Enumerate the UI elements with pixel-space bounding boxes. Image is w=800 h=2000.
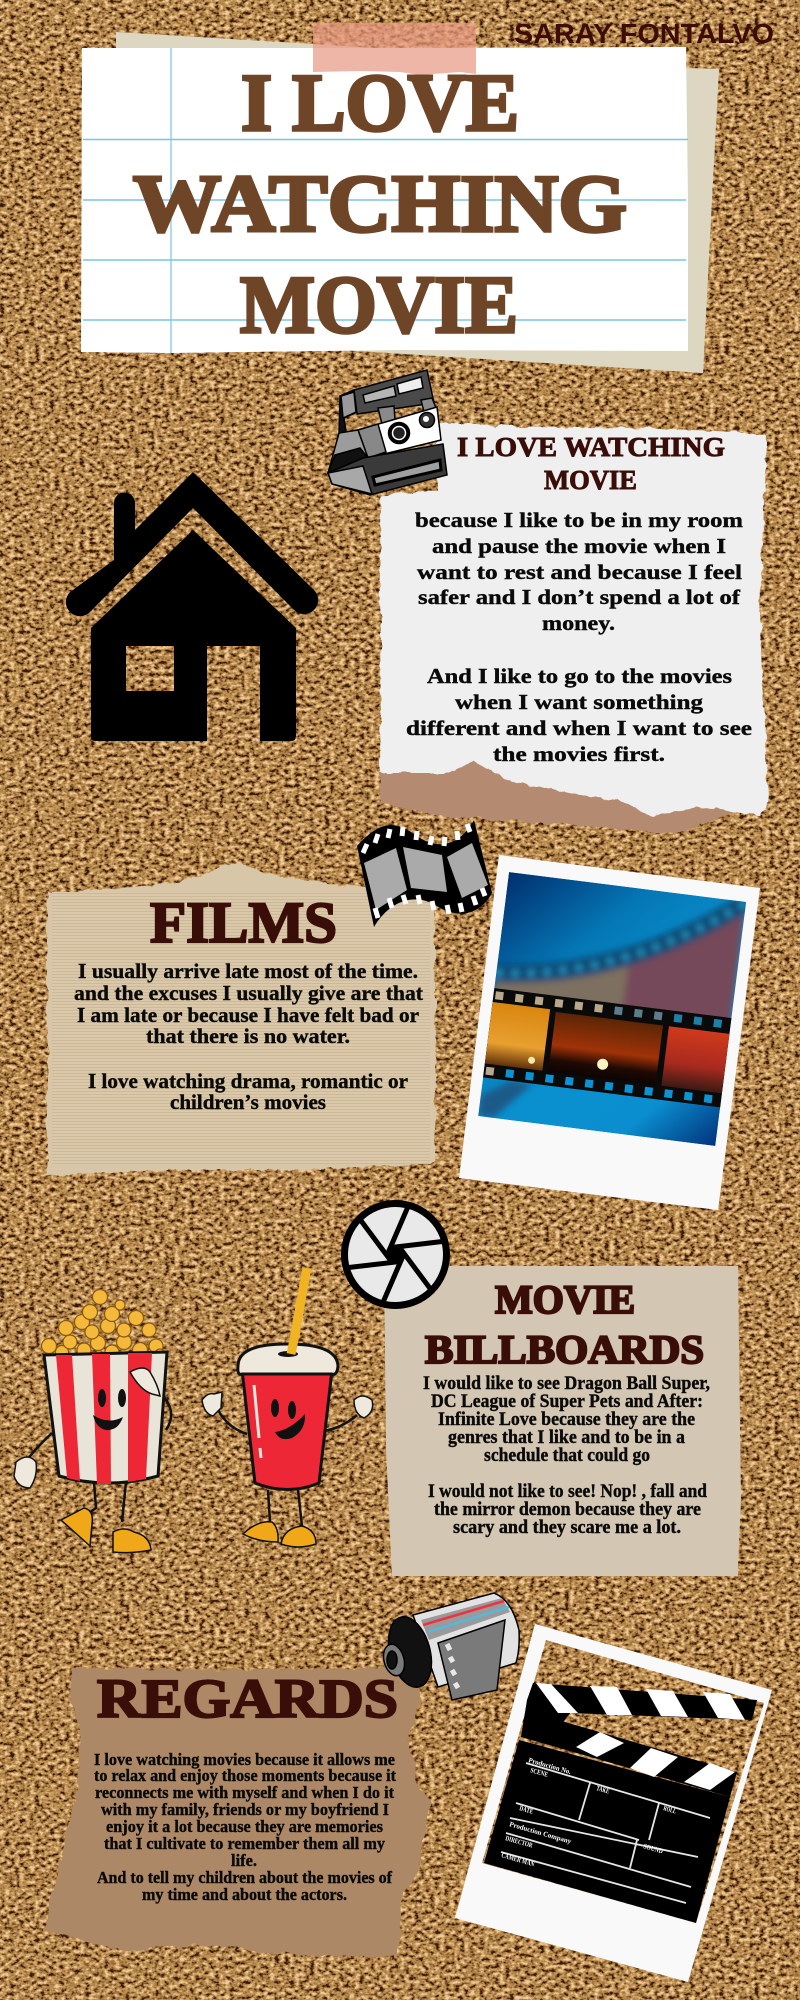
body text: because I like to be in my room (415, 508, 744, 532)
illustration: soda cup character (202, 1268, 373, 1547)
board labels: ROLL (662, 1804, 677, 1816)
straw (291, 1268, 307, 1356)
polaroid frame (459, 855, 760, 1210)
body text: safer and I don’t spend a lot of (418, 585, 741, 609)
photo (476, 872, 750, 1147)
heading: MOVIE (495, 1277, 635, 1322)
clapperboard (484, 1683, 757, 1923)
body text: and pause the movie when I (432, 534, 726, 558)
board lines (501, 1763, 710, 1903)
title text: WATCHING (133, 158, 627, 249)
face (254, 1385, 305, 1458)
body text: with my family, friends or my boyfriend I (101, 1800, 389, 1819)
icon: film roll (380, 1593, 519, 1700)
body text: I am late or because I have felt bad or (77, 1003, 419, 1027)
gloves (202, 1392, 373, 1418)
board labels: Production No. (527, 1756, 572, 1776)
icon: polaroid camera (328, 370, 447, 495)
body text: I would like to see Dragon Ball Super, (423, 1374, 710, 1394)
board labels: SCENE (529, 1766, 549, 1779)
body text: scary and they scare me a lot. (453, 1518, 681, 1538)
body text: that there is no water. (146, 1024, 350, 1048)
cardboard paper (45, 1668, 430, 1957)
back paper (116, 32, 719, 373)
lined white paper (81, 47, 688, 353)
body text: to relax and enjoy those moments because it (94, 1766, 396, 1785)
icon: film strip (357, 820, 492, 927)
body text: want to rest and because I feel (417, 560, 742, 584)
yellow shoes (243, 1522, 316, 1547)
body text: I usually arrive late most of the time. (78, 959, 418, 983)
panel: title notepaper (81, 23, 719, 373)
body text: and the excuses I usually give are that (74, 981, 423, 1005)
washi tape (313, 23, 476, 75)
panel: why I love watching movies (380, 423, 768, 834)
body text: life. (231, 1851, 257, 1870)
heading: BILLBOARDS (425, 1327, 704, 1372)
body text (94, 1750, 396, 1904)
body text: I love watching drama, romantic or (88, 1069, 408, 1093)
heading: MOVIE (544, 465, 637, 495)
body text: DC League of Super Pets and After: (431, 1392, 703, 1412)
arms and legs (27, 1395, 171, 1522)
popcorn kernels (42, 1290, 165, 1359)
body text (74, 959, 423, 1114)
body text: that I cultivate to remember them all my (104, 1834, 385, 1853)
panel: regards (45, 1668, 430, 1957)
face (93, 1389, 126, 1430)
heading (425, 1277, 704, 1372)
icon: house (66, 472, 318, 741)
body text: I love watching movies because it allows me (94, 1750, 395, 1769)
title text (133, 57, 627, 350)
panel: polaroid film photo (459, 855, 760, 1210)
body text: the movies first. (493, 742, 665, 766)
body text: my time and about the actors. (142, 1885, 347, 1904)
icon: camera shutter (344, 1204, 446, 1306)
panel: films (47, 862, 435, 1175)
body text: schedule that could go (484, 1446, 650, 1466)
body text: And to tell my children about the movies of (97, 1868, 392, 1887)
clapper stripes (536, 1683, 745, 1790)
board labels (500, 1756, 677, 1868)
heading: FILMS (150, 890, 337, 955)
panel: polaroid clapperboard (455, 1624, 772, 1982)
body text: And I like to go to the movies (427, 664, 732, 688)
illustration: popcorn character (14, 1290, 171, 1553)
paper (384, 1266, 741, 1576)
body text: reconnects me with myself and when I do it (95, 1783, 394, 1802)
canvas paper (47, 862, 435, 1175)
board labels: DATE (518, 1804, 534, 1816)
author name: SARAY FONTALVO (514, 18, 774, 49)
body text: I would not like to see! Nop! , fall and (428, 1482, 708, 1502)
heading: REGARDS (97, 1668, 398, 1729)
title text: MOVIE (240, 259, 518, 350)
body text: enjoy it a lot because they are memories (106, 1817, 383, 1836)
board labels: SOUND (642, 1842, 664, 1855)
board labels: DIRECTOR (504, 1834, 534, 1850)
heading (457, 432, 725, 495)
board labels: TAKE (595, 1784, 610, 1796)
title text: I LOVE (241, 57, 519, 148)
heading: I LOVE WATCHING (457, 432, 725, 462)
arms and legs (218, 1410, 357, 1526)
striped bucket (44, 1352, 167, 1484)
lid (238, 1330, 338, 1374)
white gloves (14, 1368, 160, 1488)
body text: genres that I like and to be in a (448, 1428, 685, 1448)
polaroid frame with cork window (455, 1624, 772, 1982)
body text: different and when I want to see (406, 716, 752, 740)
body text: when I want something (455, 690, 704, 714)
yellow shoes (61, 1508, 151, 1553)
body text (423, 1374, 710, 1538)
board labels: CAMER MAN (500, 1851, 535, 1868)
panel: movie billboards (384, 1266, 741, 1576)
body text: money. (542, 611, 615, 635)
torn brown backing (380, 760, 762, 834)
cup body (242, 1370, 332, 1490)
body text: the mirror demon because they are (434, 1500, 701, 1520)
board labels: Production Company (508, 1820, 573, 1846)
torn white paper (380, 423, 768, 816)
body text (406, 508, 752, 766)
body text: Infinite Love because they are the (438, 1410, 695, 1430)
body text: children’s movies (170, 1090, 326, 1114)
